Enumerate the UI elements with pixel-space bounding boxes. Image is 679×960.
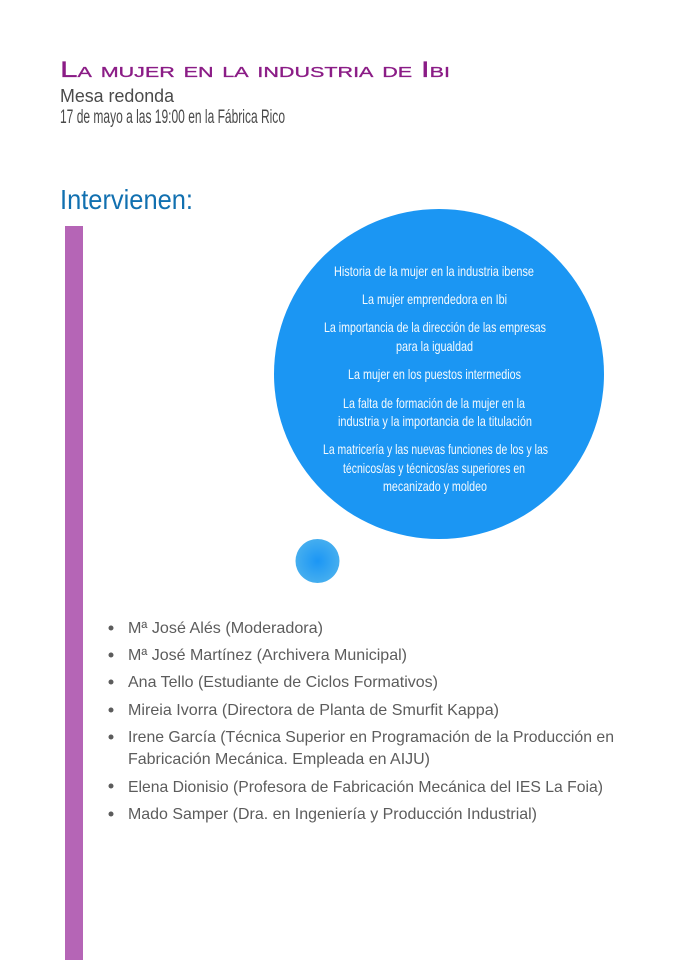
topic list: La mujer emprendedora en Ibi — [362, 291, 507, 307]
speaker: Mado Samper: Mado Samper (Dra. en Ingeniería y Producción Industrial) — [128, 806, 537, 823]
speaker: Mireia Ivorra: Mireia Ivorra (Directora de Planta de Smurfit Kappa) — [128, 702, 499, 719]
panel: topics circle — [274, 209, 604, 539]
speaker: Irene García: Fabricación Mecánica. Empleada en AIJU) — [128, 751, 430, 768]
speaker: Mª José Martínez: Mª José Martínez (Archivera Municipal) — [128, 647, 407, 664]
speaker: Elena Dionisio: Elena Dionisio (Profesora de Fabricación Mecánica del IES La Foia) — [128, 779, 603, 796]
speaker: Irene García: Irene García (Técnica Superior en Programación de la Producción en — [128, 729, 614, 746]
topic list: para la igualdad — [396, 338, 473, 354]
heading: Intervienen: Intervienen: — [60, 184, 193, 215]
date and place: 17 de mayo a las 19:00 en la Fábrica Rico — [60, 107, 285, 128]
subtitle: Mesa redonda — [60, 86, 175, 106]
title: La mujer en la industria de Ibi — [60, 57, 450, 82]
topic list: La importancia de la dirección de las empresas — [324, 319, 546, 335]
speaker: Irene García — [108, 729, 614, 768]
speakers list — [108, 620, 614, 823]
topic list: La falta de formación de la mujer en la — [343, 395, 525, 411]
topic list: Historia de la mujer en la industria ibense — [334, 263, 534, 279]
topic list: técnicos/as y técnicos/as superiores en — [343, 460, 525, 476]
large blue circle — [274, 209, 604, 539]
speaker: Mª José Alés: Mª José Alés (Moderadora) — [128, 620, 323, 637]
topic list: La mujer en los puestos intermedios — [348, 366, 521, 382]
topic list: La matricería y las nuevas funciones de los y las — [323, 441, 548, 457]
topic list: mecanizado y moldeo — [383, 478, 487, 494]
topic list: industria y la importancia de la titulación — [338, 413, 532, 429]
small blue circle — [296, 539, 340, 583]
topic list — [323, 263, 548, 494]
vertical purple bar — [65, 226, 83, 960]
speaker: Ana Tello: Ana Tello (Estudiante de Ciclos Formativos) — [128, 674, 438, 691]
